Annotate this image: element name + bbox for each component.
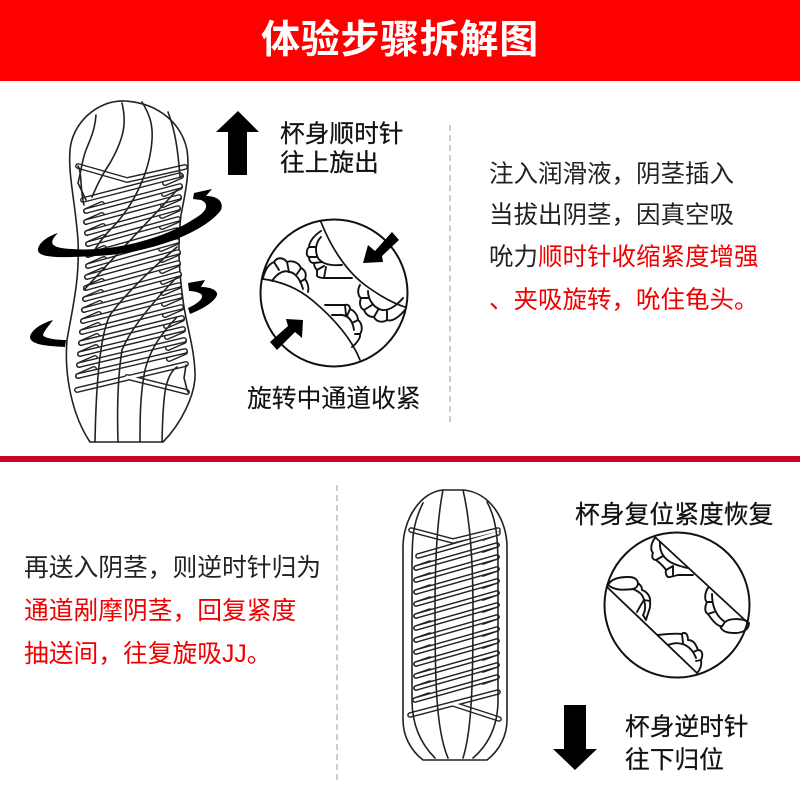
rotation arrows: [30, 189, 222, 347]
paragraph: upper instructions: 当拔出阴茎，因真空吸: [489, 202, 734, 229]
paragraph: lower instructions: 抽送间，往复旋吸JJ。: [24, 641, 272, 668]
label: clockwise up: 往上旋出: [280, 150, 379, 177]
label: clockwise up: 杯身顺时针: [280, 121, 403, 148]
paragraph: lower instructions: [24, 554, 321, 668]
section divider: [0, 456, 800, 462]
dashed divider top: [449, 125, 451, 422]
label: counter-clockwise down: 杯身逆时针: [625, 714, 748, 741]
label: clockwise up: [280, 121, 403, 177]
paragraph: lower instructions: 通道剐摩阴茎，回复紧度: [24, 598, 296, 625]
title banner: 体验步骤拆解图: [261, 19, 539, 62]
title banner: [0, 0, 800, 81]
paragraph: upper instructions: 注入润滑液，阴茎插入: [489, 161, 734, 188]
label: channel tightening: 旋转中通道收紧: [247, 386, 421, 413]
label: counter-clockwise down: 往下归位: [625, 747, 724, 774]
label: counter-clockwise down: [625, 714, 748, 774]
paragraph: upper instructions: 吮力顺时针收缩紧度增强: [489, 244, 758, 271]
label: sleeve reset: 杯身复位紧度恢复: [575, 502, 773, 529]
dashed divider bottom: [336, 485, 338, 780]
paragraph: upper instructions: [489, 161, 758, 314]
paragraph: lower instructions: 再送入阴茎，则逆时针归为: [24, 555, 321, 582]
paragraph: upper instructions: 、夹吸旋转，吮住龟头。: [489, 287, 758, 314]
